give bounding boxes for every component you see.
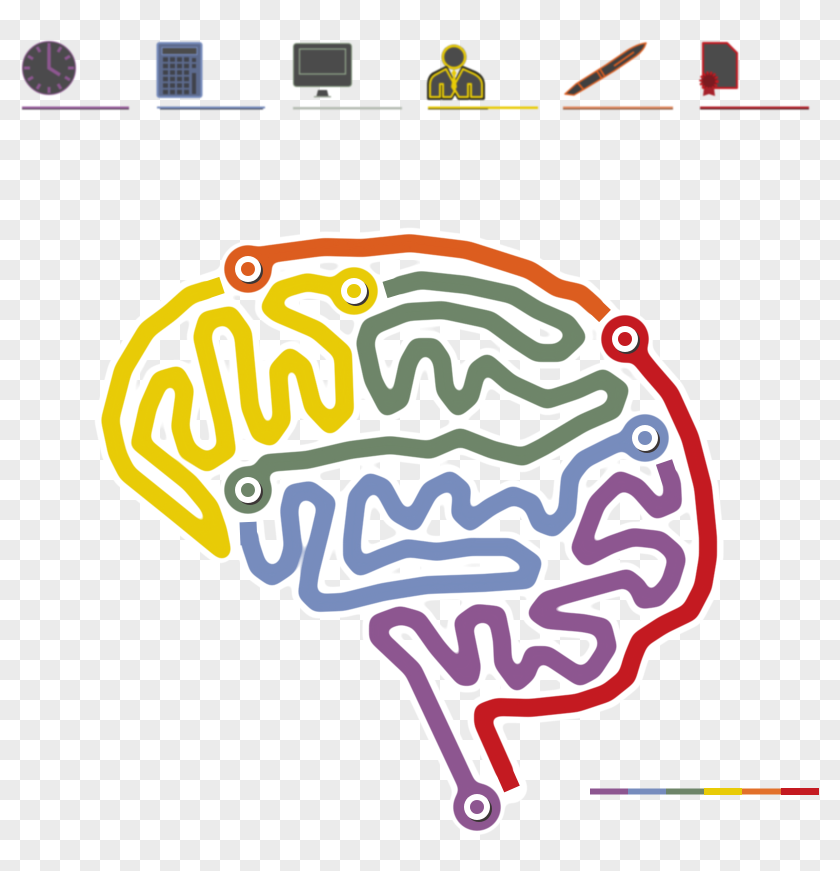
rule: certificate document [700,106,809,110]
icon: calculator [158,43,202,97]
icon: pen [565,43,646,95]
node: yellow [341,278,369,306]
node: purple [464,794,492,822]
brain: blue segment [248,414,669,603]
brain: orange segment [224,243,605,316]
node: red [612,326,640,354]
rule: monitor [293,107,402,110]
brain white halo [110,243,708,821]
rule: calculator [157,106,265,110]
icon: certificate document [701,43,737,96]
node: green [235,477,263,505]
node markers [235,256,660,822]
brain: purple segment [378,462,677,831]
node: orange [235,256,263,284]
brain: red segment [483,315,708,789]
icon: person [429,44,483,98]
node: blue [632,425,660,453]
icon row [22,42,809,110]
brain: green segment [224,280,620,514]
icon: clock [22,42,76,94]
icon: monitor [294,44,352,98]
rule: person [428,106,538,110]
brain: yellow segment [110,267,378,550]
rule: pen [563,106,673,110]
rule: clock [22,106,129,110]
colour legend bar [590,788,819,795]
